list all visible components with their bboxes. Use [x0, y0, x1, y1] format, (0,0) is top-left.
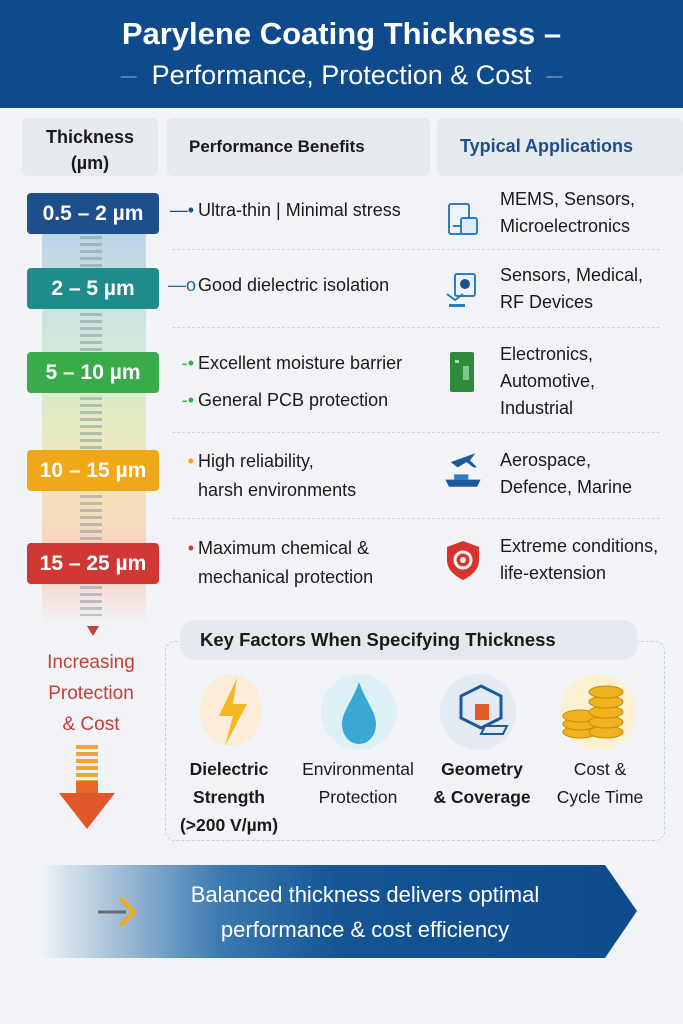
- app text 1: [500, 189, 635, 236]
- app text 4: Aerospace,: [500, 450, 591, 470]
- icon: plane and ship: [446, 453, 480, 487]
- thickness box 0.5-2: [27, 193, 159, 234]
- column header: performance: [167, 118, 430, 176]
- factor 3: geometry: & Coverage: [433, 787, 531, 807]
- column header: thickness: (µm): [71, 153, 109, 173]
- banner arrow: [98, 896, 137, 928]
- key factors title: [180, 620, 637, 660]
- thickness box 2-5: 2 – 5 µm: [51, 277, 135, 300]
- app text 1: Microelectronics: [500, 216, 630, 236]
- benefit row 4: [188, 451, 356, 500]
- benefit row 3: [182, 353, 402, 410]
- text: -•: [182, 353, 194, 373]
- thickness box 0.5-2: 0.5 – 2 µm: [43, 202, 143, 225]
- title: Parylene Coating Thickness –: [122, 16, 561, 51]
- scale ticks: [80, 236, 102, 616]
- icon: shield: [447, 541, 479, 580]
- factor 2: environmental: Environmental: [302, 759, 414, 779]
- factor 3: geometry: Geometry: [441, 759, 523, 779]
- column header: performance: Performance Benefits: [189, 137, 365, 156]
- text: •: [188, 451, 194, 471]
- icon: medical sensor: [446, 273, 476, 307]
- factor 1: dielectric: Strength: [193, 787, 265, 807]
- increasing protection label: Protection: [48, 683, 134, 704]
- app text 5: life-extension: [500, 563, 606, 583]
- app text 2: Sensors, Medical,: [500, 265, 643, 285]
- benefit row 2: Good dielectric isolation: [198, 275, 389, 295]
- factor 4: cost: [557, 674, 643, 807]
- increasing protection label: & Cost: [62, 714, 120, 735]
- factor 1: dielectric: Dielectric: [190, 759, 268, 779]
- thickness box 10-15: [27, 450, 159, 491]
- text: -•: [182, 390, 194, 410]
- factor 2: environmental: Protection: [319, 787, 397, 807]
- column header: thickness: [22, 118, 158, 176]
- text: —o: [168, 275, 196, 295]
- app text 3: [500, 344, 595, 418]
- bottom banner: [40, 865, 637, 958]
- app text 1: MEMS, Sensors,: [500, 189, 635, 209]
- factor 4: cost: Cycle Time: [557, 787, 643, 807]
- thickness box 5-10: 5 – 10 µm: [46, 361, 140, 384]
- benefit row 3: Excellent moisture barrier: [198, 353, 402, 373]
- benefit row 1: Ultra-thin | Minimal stress: [198, 200, 401, 220]
- thickness box 2-5: [27, 268, 159, 309]
- column header: thickness: Thickness: [46, 127, 134, 147]
- thickness box 15-25: 15 – 25 µm: [40, 552, 146, 575]
- app text 4: Defence, Marine: [500, 477, 632, 497]
- benefit row 4: High reliability,: [198, 451, 314, 471]
- subtitle: — Performance, Protection & Cost —: [121, 60, 562, 90]
- thickness gradient scale: [42, 230, 146, 625]
- key factors title: Key Factors When Specifying Thickness: [200, 629, 556, 650]
- factor 1: dielectric: (>200 V/µm): [180, 815, 278, 835]
- thickness box 15-25: [27, 543, 159, 584]
- app text 5: [500, 536, 658, 583]
- app text 5: Extreme conditions,: [500, 536, 658, 556]
- small down arrow: [87, 626, 99, 636]
- key factors panel: [165, 641, 665, 841]
- app text 2: RF Devices: [500, 292, 593, 312]
- benefit row 5: Maximum chemical &: [198, 538, 369, 558]
- banner text: [192, 886, 538, 942]
- column header: applications: [437, 118, 683, 176]
- increasing protection label: [47, 652, 135, 735]
- banner text: performance & cost efficiency: [221, 917, 509, 942]
- factor 3: geometry: [433, 674, 531, 807]
- column header: applications: Typical Applications: [460, 136, 633, 156]
- header banner: [0, 0, 683, 108]
- increasing protection label: Increasing: [47, 652, 135, 673]
- thickness box 5-10: [27, 352, 159, 393]
- app text 4: [500, 450, 632, 497]
- app text 3: Industrial: [500, 398, 573, 418]
- app text 3: Automotive,: [500, 371, 595, 391]
- app text 3: Electronics,: [500, 344, 593, 364]
- text: •: [188, 538, 194, 558]
- benefit row 3: General PCB protection: [198, 390, 388, 410]
- factor 1: dielectric: [180, 674, 278, 835]
- app text 2: [500, 265, 643, 312]
- icon: MEMS chip: [448, 203, 478, 235]
- benefit row 5: [188, 538, 373, 587]
- banner text: Balanced thickness delivers optimal: [191, 882, 539, 907]
- benefit row 4: harsh environments: [198, 480, 356, 500]
- factor 4: cost: Cost &: [574, 759, 626, 779]
- big down arrow: [59, 745, 115, 829]
- factor 2: environmental: [302, 674, 414, 807]
- icon: PCB: [450, 352, 474, 392]
- thickness box 10-15: 10 – 15 µm: [40, 459, 146, 482]
- benefit row 5: mechanical protection: [198, 567, 373, 587]
- text: —•: [170, 200, 194, 220]
